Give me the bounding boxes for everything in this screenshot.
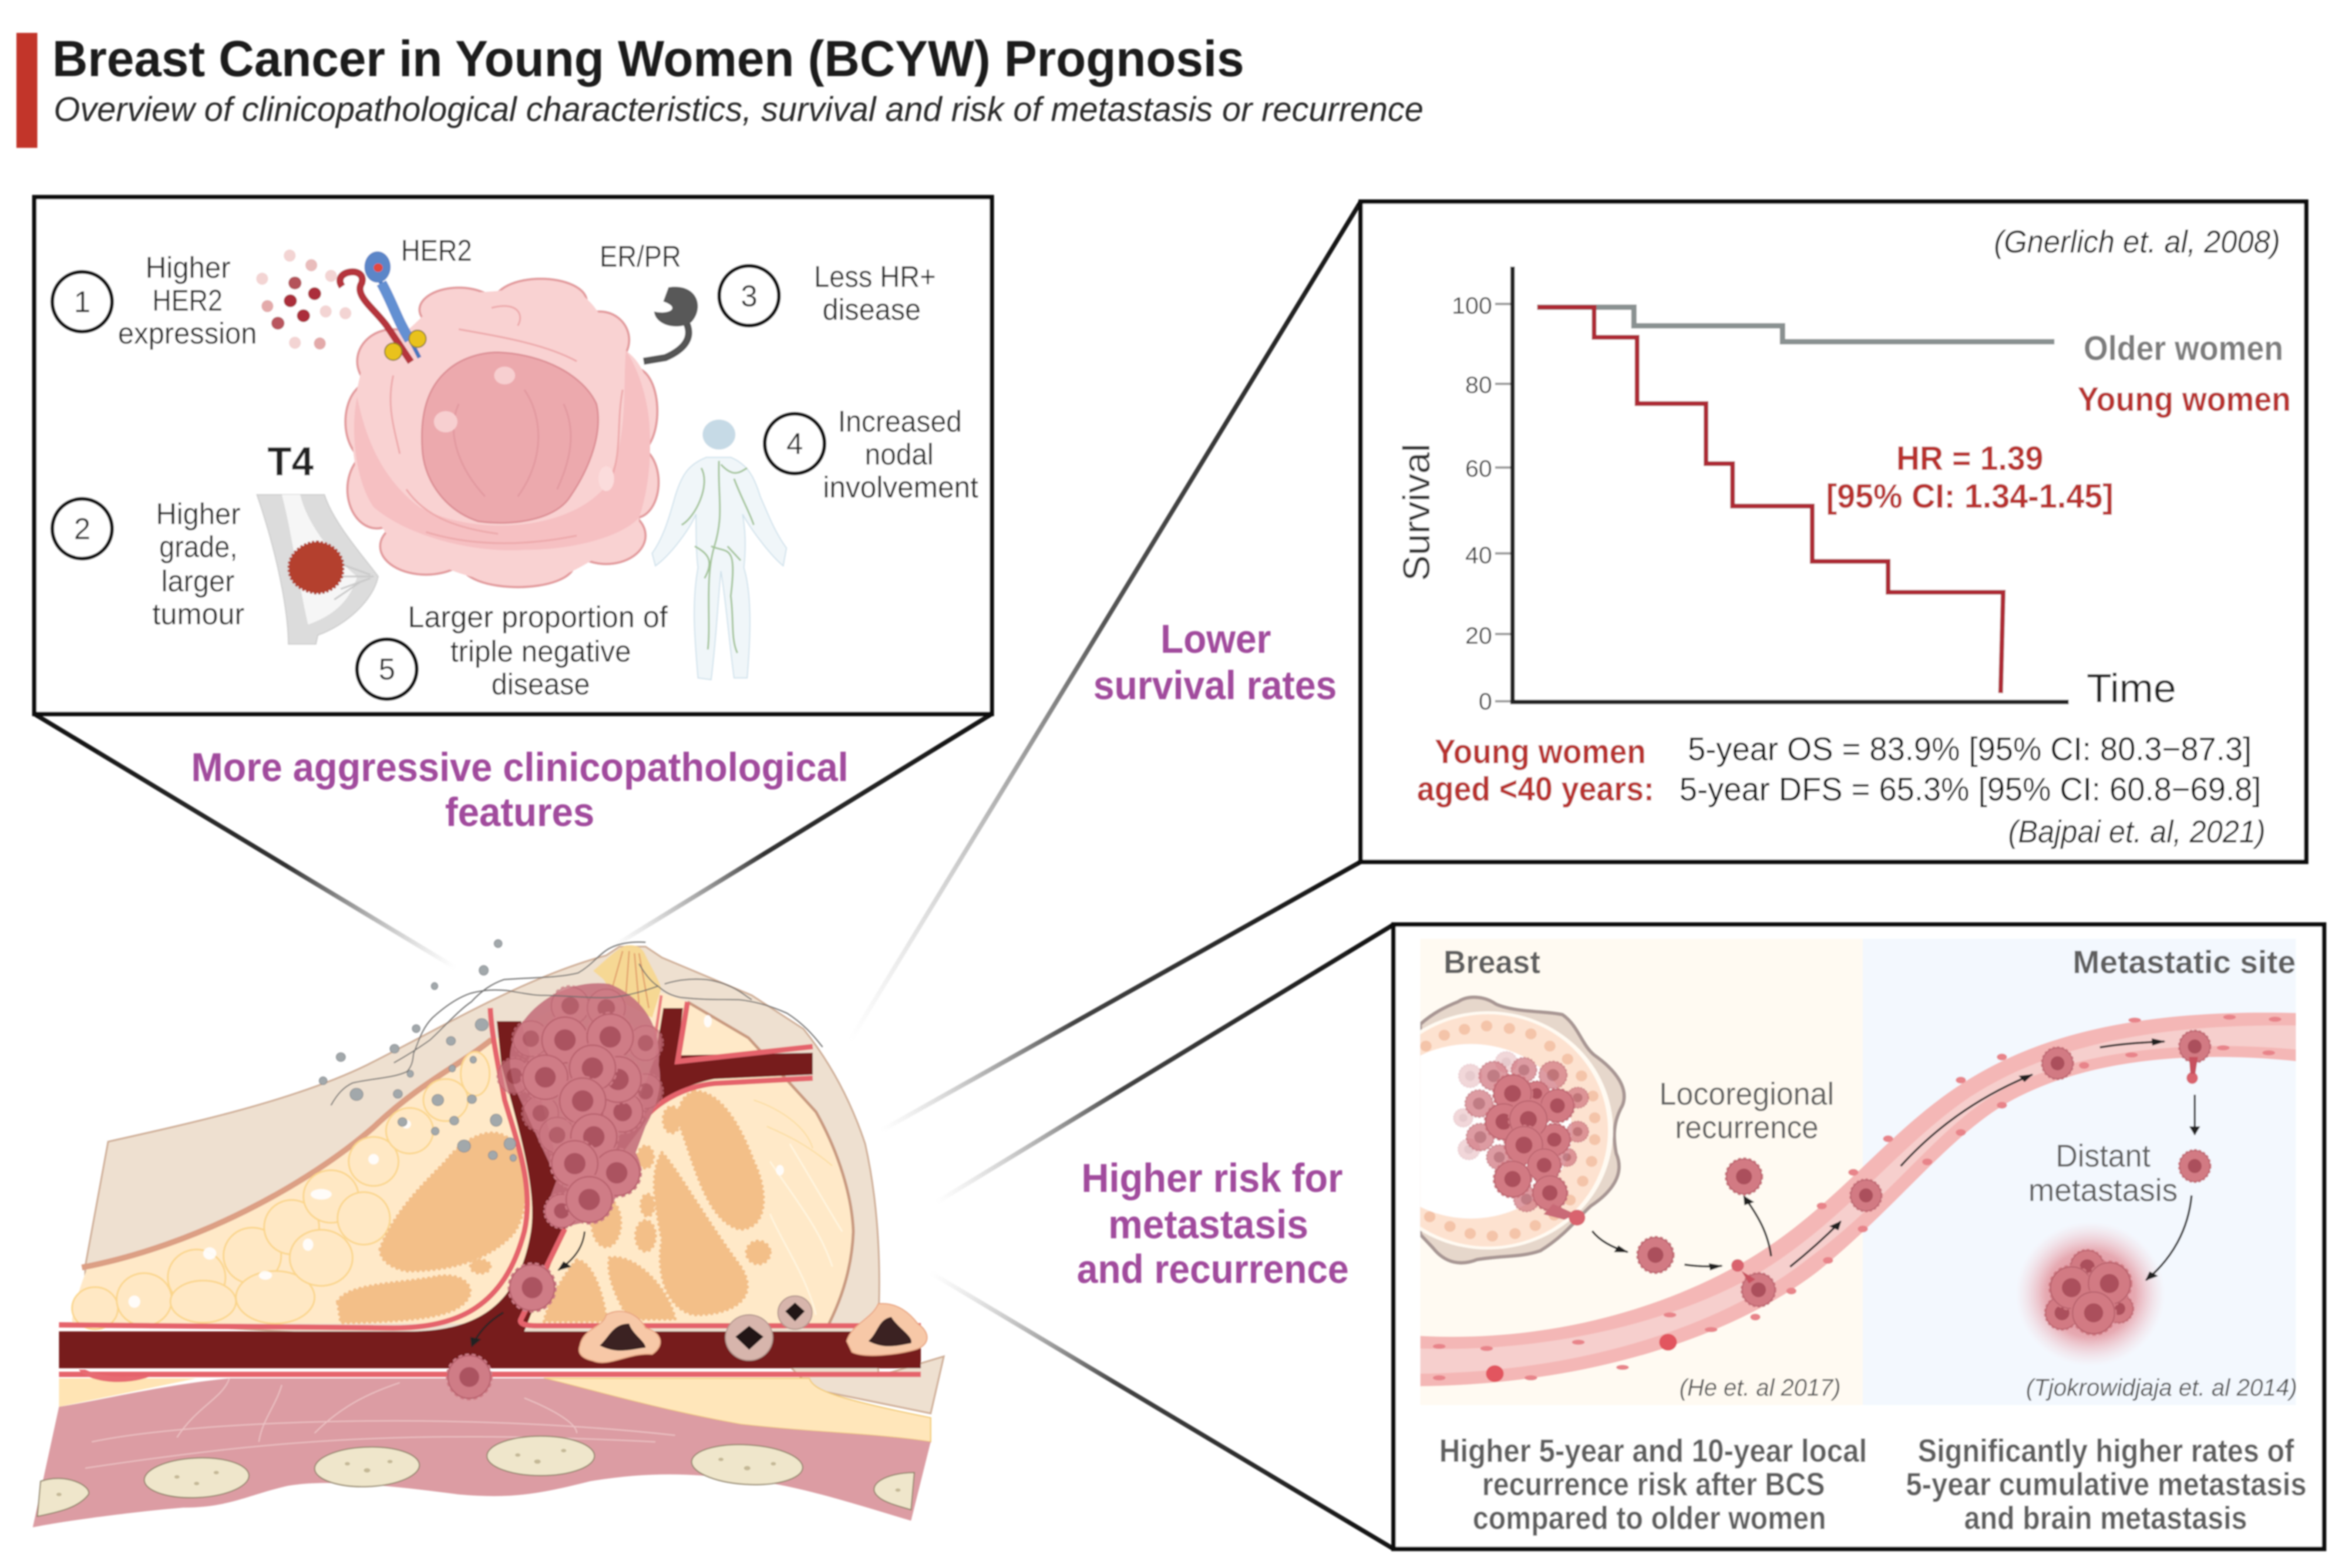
badge 1 [52,272,112,332]
Metastatic site label: Metastatic site [2072,944,2296,980]
distant label: metastasis [2028,1173,2178,1208]
local recurrence summary [1439,1432,1867,1536]
legend: young women: Young women [2078,381,2291,418]
metastasis summary: and brain metastasis [1964,1499,2247,1536]
survival chart: 20 [1465,623,1492,649]
feature 1 text: Higher [146,251,231,284]
badge 1: 1 [74,285,90,319]
badge 2: 2 [74,512,90,546]
title accent bar [16,33,38,148]
heading: lower survival: Lower [1160,616,1271,661]
survival statistics: 5-year OS = 83.9% [95% CI: 80.3−87.3] [1688,731,2252,768]
ER/PR label: ER/PR [600,240,681,273]
survival statistics [1680,731,2261,807]
mammary lobes [338,1091,770,1323]
hazard ratio [1826,440,2114,516]
icon: HER2 receptor and ligands [256,250,426,362]
blood vessel [1420,1012,2296,1386]
badge 2 [52,499,112,558]
survival chart: 40 [1465,543,1492,568]
distant label [2028,1139,2178,1208]
young women label: Young women [1435,733,1646,771]
feature 4 text: Increased [838,405,962,438]
survival chart: 80 [1465,372,1492,398]
icon: ER/PR receptor [644,287,698,361]
feature 4 text: involvement [823,470,978,504]
feature 5 text: triple negative [450,635,631,668]
pathway arrows [1592,1041,2195,1280]
y axis label: Survival [1396,443,1438,581]
feature 3 text [814,260,936,326]
legend: older women: Older women [2084,329,2283,368]
heading: higher risk [1077,1156,1349,1292]
metastatic site background [1863,938,2296,1405]
feature 5 text: Larger proportion of [408,600,668,634]
feature 2 text [152,497,244,631]
young women label [1417,733,1654,808]
feature 3 text: Less HR+ [814,260,936,293]
citation Tjokrowidjaja: (Tjokrowidjaja et. al 2014) [2026,1374,2297,1401]
survival statistics: 5-year DFS = 65.3% [95% CI: 60.8−69.8] [1680,770,2261,807]
subtitle: Overview of clinicopathological characteristics, survival and risk of metastasis or recurrence [54,90,1424,129]
grey microcalcification dots [319,940,516,1162]
illustration: tumour and feature icons [256,250,786,679]
citation He: (He et. al 2017) [1680,1374,1840,1401]
heading: higher risk: Higher risk for [1081,1156,1342,1201]
locoregional label [1659,1077,1834,1145]
heading: higher risk: metastasis [1108,1202,1308,1247]
badge 3: 3 [741,279,758,312]
survival chart: 60 [1465,456,1492,482]
hazard ratio: [95% CI: 1.34-1.45] [1826,478,2114,516]
icon: lymphatic body [652,419,786,679]
metastasis summary: 5-year cumulative metastasis [1906,1466,2307,1502]
breast cross-section illustration [33,940,944,1527]
locoregional label: recurrence [1675,1111,1819,1145]
survival chart: 0 [1479,689,1492,715]
local recurrence summary: compared to older women [1473,1499,1826,1536]
panel: metastasis and recurrence [1362,924,2324,1549]
connector lines from breast to panels [34,201,1394,1549]
Breast label: Breast [1443,944,1540,980]
tumour cell cluster [447,983,662,1399]
skin layer [85,947,944,1414]
locoregional label: Locoregional [1659,1077,1834,1112]
survival chart [1396,267,2176,715]
badge 5: 5 [379,652,395,686]
title: Breast Cancer in Young Women (BCYW) Prognosis [52,31,1244,88]
local recurrence summary: recurrence risk after BCS [1482,1466,1825,1502]
citation Gnerlich: (Gnerlich et. al, 2008) [1994,225,2280,260]
HER2 label: HER2 [401,234,472,267]
metastasis pathway illustration [1362,938,2296,1405]
hazard ratio: HR = 1.39 [1896,440,2043,477]
duct with tumour [1419,995,1627,1266]
icon: tumour mass [345,279,659,587]
badge 4: 4 [786,427,803,460]
panel: clinicopathological features [34,197,992,714]
survival chart: 100 [1452,293,1492,319]
heading: aggressive features [191,745,849,835]
feature 5 text: disease [492,668,590,701]
circulating tumour cells [1486,1031,2210,1382]
feature 2 text: larger [161,564,234,598]
nipple [593,945,661,1018]
icon: T4 breast [257,494,378,644]
metastasis summary [1906,1432,2307,1536]
distant label: Distant [2055,1139,2151,1173]
metastasis summary: Significantly higher rates of [1918,1432,2294,1469]
feature 5 text [408,600,668,701]
feature 1 text [118,251,257,350]
local recurrence summary: Higher 5-year and 10-year local [1439,1432,1867,1469]
badge 4 [765,414,825,473]
heading: higher risk: and recurrence [1077,1247,1349,1292]
heading: lower survival [1093,616,1337,708]
feature 4 text [823,405,978,504]
feature 4 text: nodal [865,438,934,471]
blood duct network [59,995,921,1382]
breast background [1420,938,1863,1405]
panel: survival [1361,201,2306,862]
feature 2 text: grade, [159,530,237,564]
fat tissue [72,991,853,1329]
feature 2 text: tumour [152,597,244,631]
T4 label: T4 [267,439,314,484]
feature 1 text: expression [118,317,257,350]
feature 2 text: Higher [156,497,241,531]
badge 5 [357,640,417,699]
nerve fibres [331,942,823,1105]
heading: aggressive features: More aggressive clinicopathological [191,745,849,790]
heading: lower survival: survival rates [1093,662,1337,708]
badge 3 [719,266,779,325]
heading: aggressive features: features [445,789,594,835]
necrotic tumour foci [579,1296,927,1362]
invasion arrows [472,1231,584,1347]
feature 1 text: HER2 [152,284,223,317]
citation Bajpai: (Bajpai et. al, 2021) [2008,815,2266,849]
metastatic tumour with glow [2016,1222,2165,1366]
young women label: aged <40 years: [1417,770,1654,808]
feature 3 text: disease [823,292,921,326]
x axis label: Time [2087,665,2176,711]
muscle and ribs [33,1378,931,1527]
